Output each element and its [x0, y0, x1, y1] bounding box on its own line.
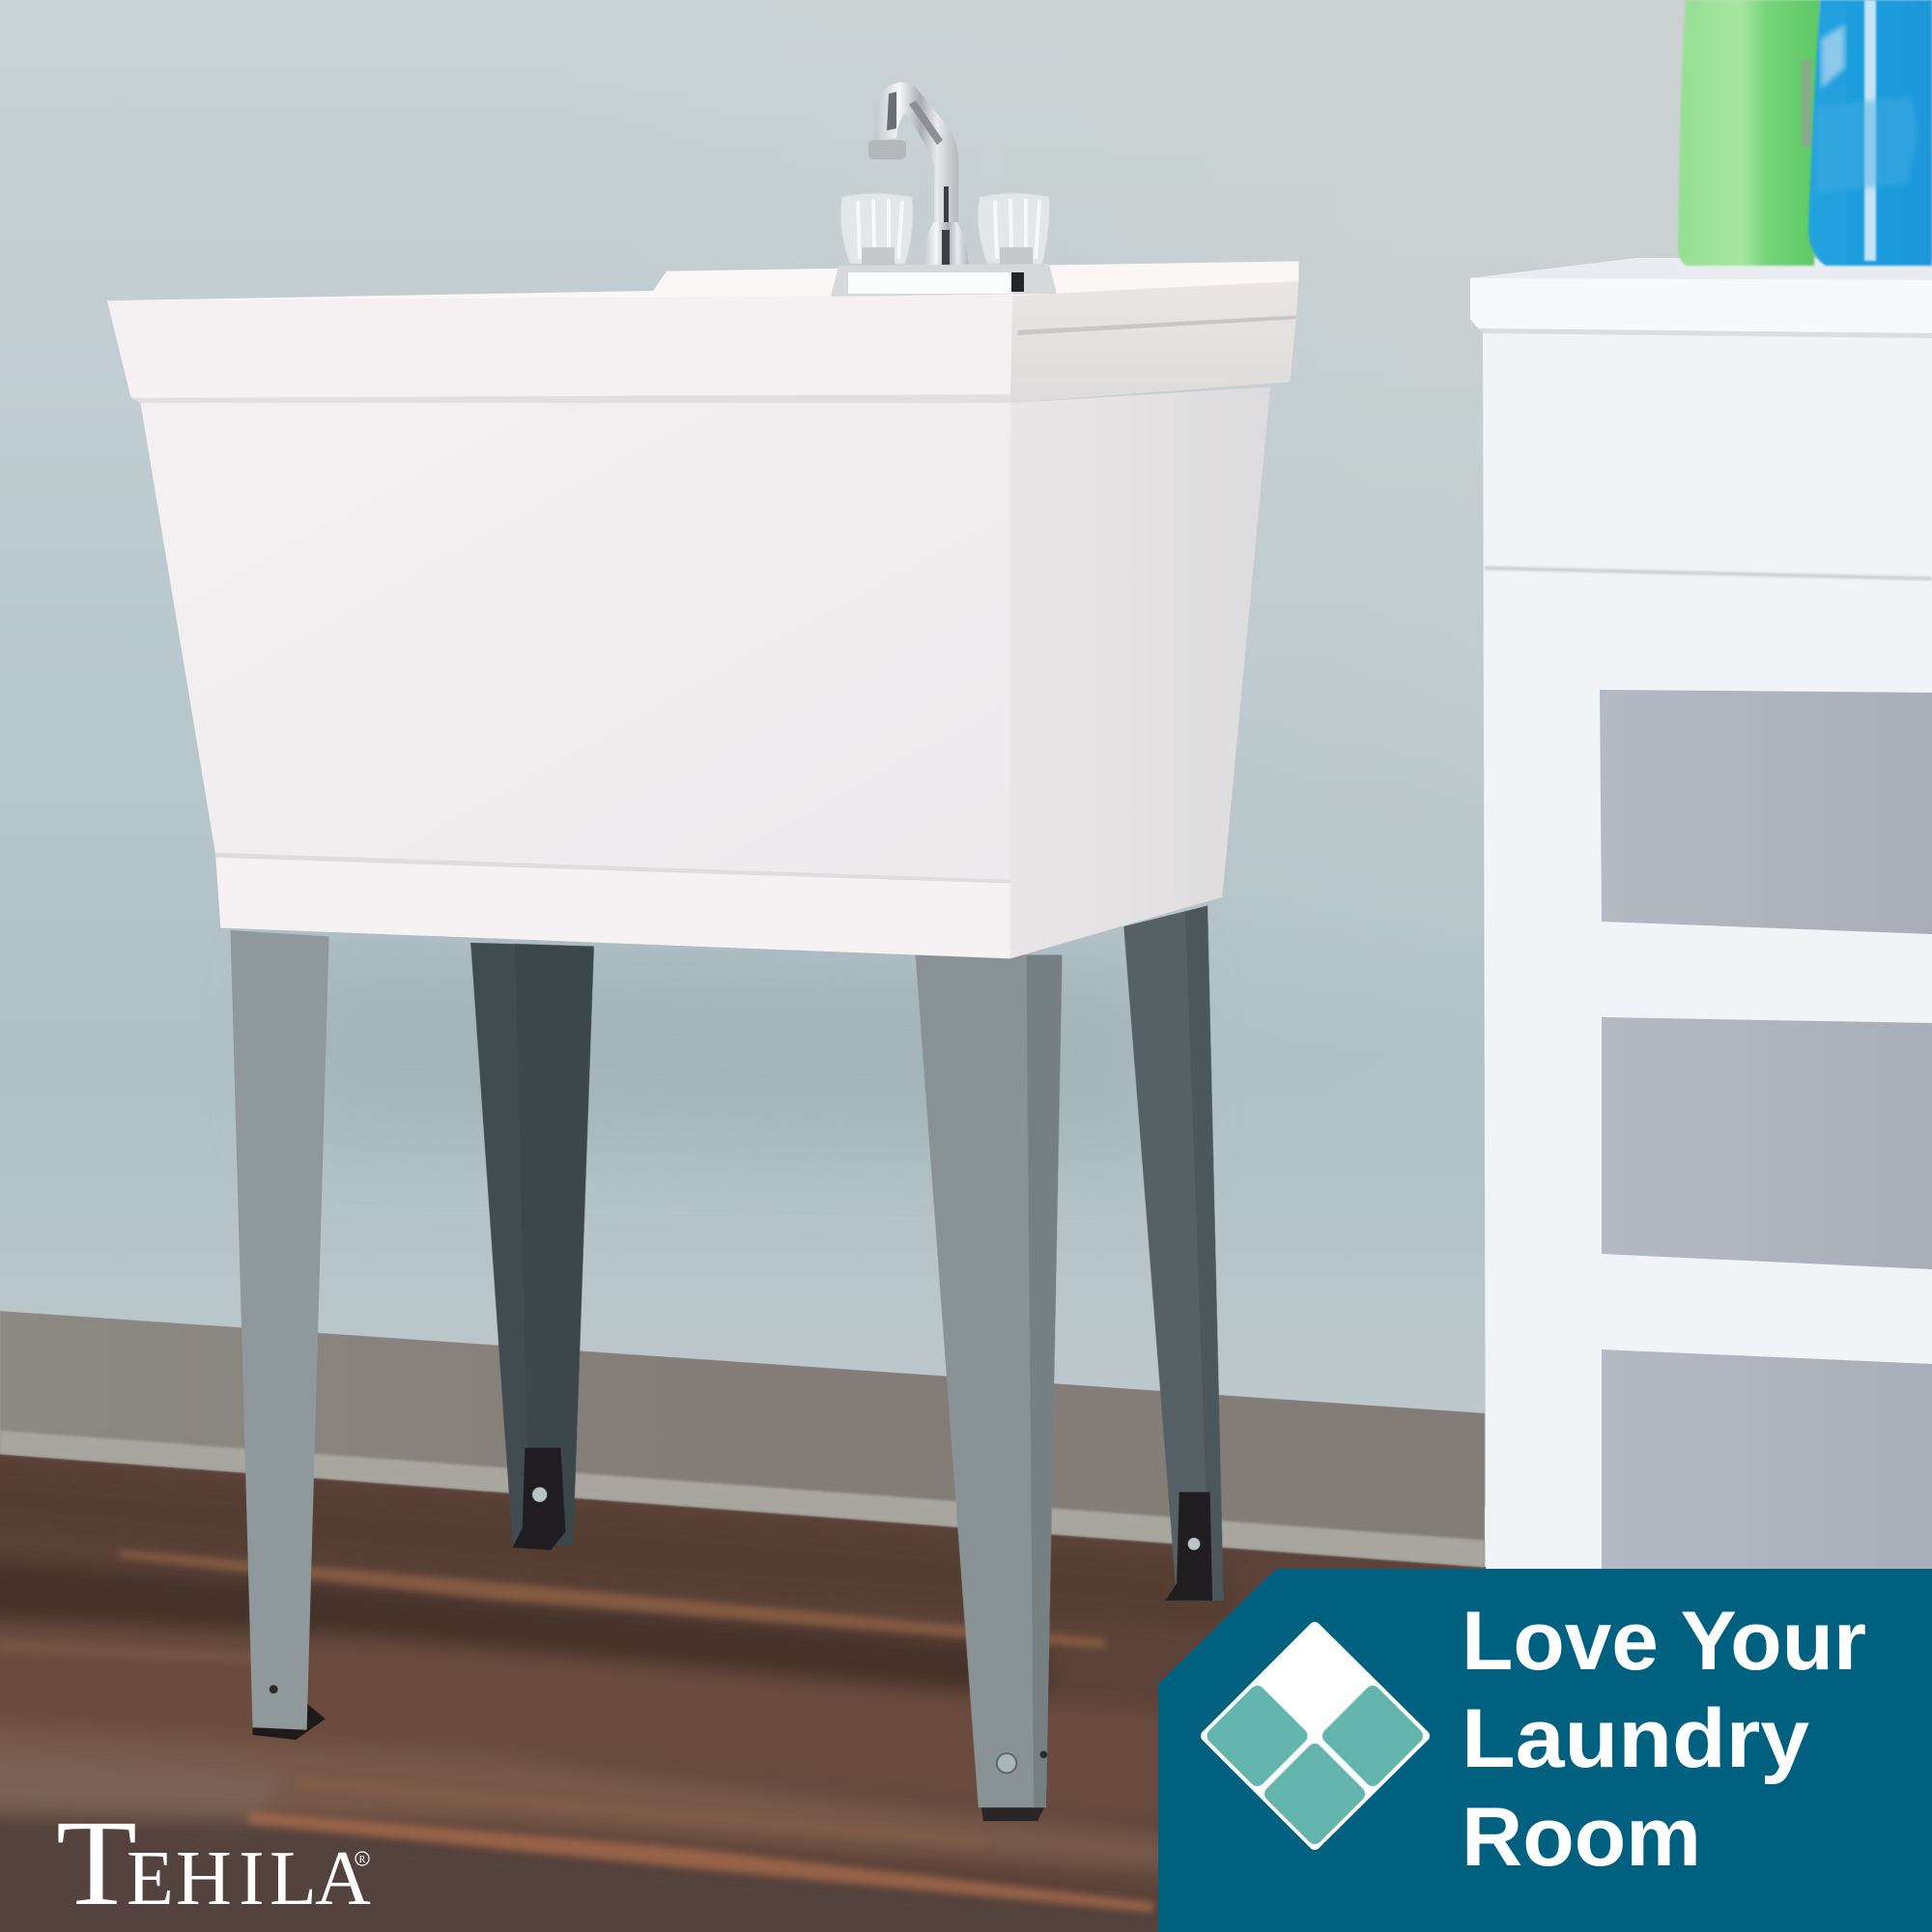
leg: back left — [470, 943, 594, 1550]
bottle label — [1802, 60, 1811, 147]
sink bottom band — [215, 855, 1010, 958]
leg: front right — [916, 955, 1062, 1821]
cabinet — [1470, 258, 1932, 1570]
brand logo: Tehila — [56, 1796, 371, 1931]
blue bottle — [1808, 0, 1932, 266]
faucet aerator — [868, 140, 906, 159]
sink rim front — [107, 296, 1012, 403]
faucet spout — [874, 82, 958, 222]
faucet plate — [831, 264, 1056, 297]
cabinet glass panels — [1600, 690, 1932, 1570]
cabinet drawer line — [1485, 566, 1932, 581]
leg: back right — [1123, 905, 1224, 1601]
callout panel — [1158, 1569, 1932, 1932]
cabinet body — [1483, 328, 1932, 1570]
icon: diamond logo — [1207, 1628, 1424, 1844]
foot bracket — [513, 1448, 565, 1550]
brand logo: Tehila: EHILA — [127, 1836, 371, 1921]
wall background — [0, 0, 1932, 1507]
foot bracket — [1166, 1492, 1212, 1601]
faucet base cone — [923, 222, 969, 268]
headline — [1462, 1595, 1866, 1884]
floor — [0, 1454, 1491, 1932]
brand logo: Tehila: R — [359, 1855, 366, 1865]
faucet knob left — [840, 193, 913, 265]
green bottle — [1678, 0, 1820, 266]
faucet knob right — [978, 193, 1049, 265]
headline: Laundry — [1462, 1692, 1809, 1785]
sink front face — [140, 403, 1010, 882]
panel background — [1158, 1569, 1932, 1932]
sink — [107, 261, 1298, 958]
bottles — [1678, 0, 1932, 266]
brand logo: Tehila: T — [56, 1796, 137, 1931]
sink right side — [1010, 387, 1270, 958]
headline: Love Your — [1462, 1595, 1866, 1688]
baseboard — [0, 1311, 1485, 1567]
faucet — [831, 82, 1056, 297]
sink rim right — [1010, 280, 1298, 403]
sink rim top — [107, 261, 1298, 300]
headline: Room — [1462, 1791, 1701, 1884]
leg: front left — [231, 930, 329, 1740]
